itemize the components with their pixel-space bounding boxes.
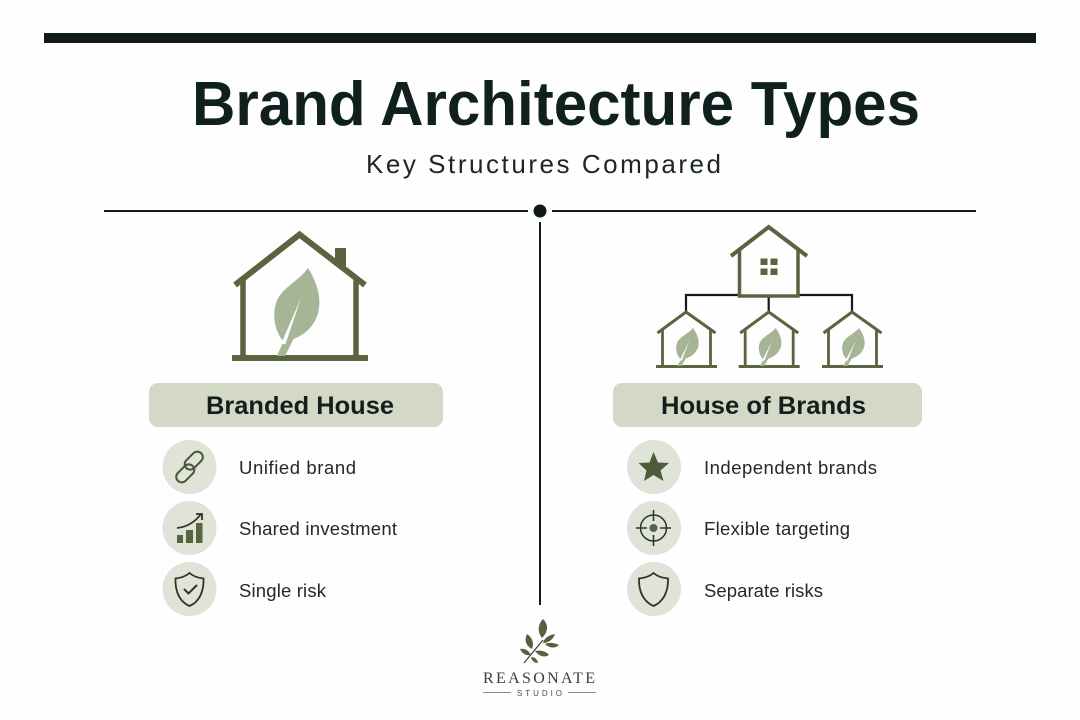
item: Shared investment	[162, 501, 397, 555]
icon: house of brands	[656, 227, 883, 368]
icon: star	[638, 452, 669, 481]
icon: target	[636, 510, 671, 546]
divider with centre dot	[104, 204, 976, 605]
child house 1	[656, 312, 717, 368]
subtitle: Key Structures Compared	[366, 149, 721, 179]
parent house	[731, 227, 807, 296]
child house 3	[822, 312, 883, 368]
top bar	[44, 33, 1036, 43]
title: Brand Architecture Types	[192, 70, 920, 139]
item: Shared investment: Shared investment	[239, 518, 397, 539]
item: Unified brand	[162, 440, 356, 494]
item: Single risk: Single risk	[239, 580, 327, 601]
icon: growth chart	[177, 514, 202, 543]
logo: Reasonate Studio: REASONATE	[483, 670, 595, 687]
icon: sprig	[520, 619, 559, 663]
heading: House of Brands: House of Brands	[661, 392, 866, 420]
icon: shield	[639, 573, 668, 606]
item: Single risk	[162, 562, 327, 616]
heading: Branded House: Branded House	[206, 392, 394, 420]
logo: Reasonate Studio: STUDIO	[517, 689, 562, 698]
heading: House of Brands	[613, 383, 922, 427]
item: Flexible targeting: Flexible targeting	[704, 518, 850, 539]
item: Flexible targeting	[627, 501, 850, 555]
item: Independent brands: Independent brands	[704, 457, 877, 478]
connectors	[686, 295, 852, 311]
item: Unified brand: Unified brand	[239, 457, 356, 478]
icon: branded house	[232, 234, 368, 361]
icon: link	[172, 449, 207, 485]
item: Separate risks: Separate risks	[704, 580, 823, 601]
child house 2	[739, 312, 800, 368]
item: Independent brands	[627, 440, 877, 494]
heading: Branded House	[149, 383, 443, 427]
item: Separate risks	[627, 562, 823, 616]
icon: shield check	[175, 573, 204, 606]
logo: Reasonate Studio	[483, 619, 596, 698]
